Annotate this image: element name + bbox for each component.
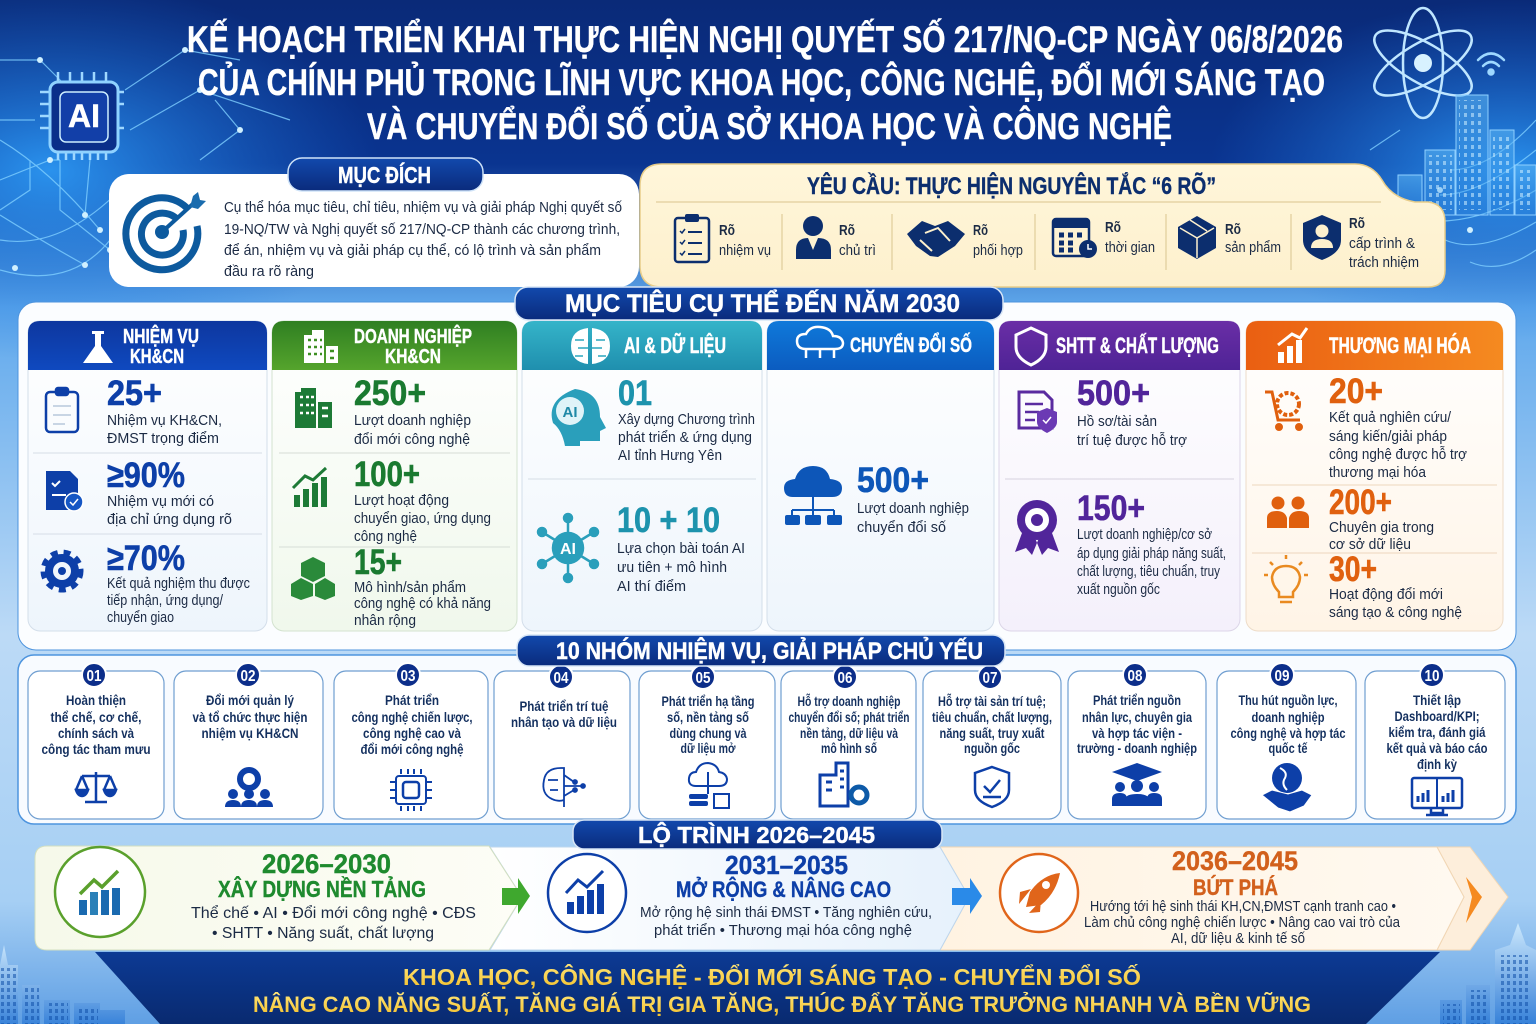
card 08: trường - doanh nghiệp [1077,741,1197,756]
stat: 25+: Nhiệm vụ KH&CN, [107,413,222,429]
stat: 15+: công nghệ có khả năng [354,596,491,612]
icon: rocket [1019,873,1060,913]
arrow: orange [1466,877,1482,923]
item: rõ phối hợp [907,221,1023,259]
card 06 [781,665,916,819]
icon: flask [83,331,113,363]
icon: gear team [225,770,273,807]
column: thương mại hóa: THƯƠNG MẠI HÓA [1329,333,1471,358]
column: thương mại hóa [1246,321,1503,631]
stat: 01 [618,374,755,464]
card 08 [1068,663,1206,819]
icon: chip [390,769,432,811]
item: rõ sản phẩm [1178,216,1281,259]
card 05: dùng chung và [670,726,747,741]
text: mục đích: 19-NQ/TW và Nghị quyết số 217/NQ-CP thành các chương trình, [224,221,620,238]
card 10: Dashboard/KPI; [1394,709,1480,724]
stat: 10 + 10: 10 + 10 [617,501,720,540]
stat: 20+ [1329,372,1467,481]
stage: 2026-2030: • SHTT • Năng suất, chất lượng [212,925,434,942]
item: rõ thời gian: Rõ [1105,220,1121,236]
icon: document shield [1019,392,1057,433]
stage: 2031-2035: 2031–2035 [725,850,848,880]
column: AI & dữ liệu: AI & DỮ LIỆU [624,333,726,358]
stage: 2036-2045: AI, dữ liệu & kinh tế số [1171,931,1305,947]
card 01: thể chế, cơ chế, [50,710,142,725]
column: chuyển đổi số: CHUYỂN ĐỔI SỐ [850,333,972,357]
icon: AI network [538,514,598,582]
stat: 500+ doanh nghiệp [857,461,969,536]
card 08: 08 [1128,668,1143,685]
card 02: 02 [240,668,256,685]
stat: 30+: 30+ [1329,550,1377,589]
card 02 [174,663,323,819]
item: rõ thời gian: thời gian [1105,240,1155,256]
stat: 90%: Nhiệm vụ mới có [107,494,214,510]
stat: 20+: thương mại hóa [1329,465,1427,481]
card 01: chính sách và [58,726,134,741]
stat: 01: phát triển & ứng dụng [618,430,752,446]
item: rõ thời gian [1053,219,1155,258]
card 09: Thu hút nguồn lực, [1238,693,1338,708]
heading: mục đích [288,158,483,191]
card 02: Đổi mới quản lý [206,693,294,708]
stat: 200+: 200+ [1329,483,1392,522]
item: rõ chủ trì: Rõ [839,223,855,239]
card 09: 09 [1274,668,1290,685]
stat: 20+: công nghệ được hỗ trợ [1329,446,1467,463]
stage: 2036-2045: 2036–2045 [1172,846,1298,876]
card 04: nhân tạo và dữ liệu [511,715,617,730]
stat: 01: AI tỉnh Hưng Yên [618,448,722,464]
stage: 2026-2030: XÂY DỰNG NỀN TẢNG [218,874,426,902]
card 03: đổi mới công nghệ [360,742,464,757]
stat: 25+: 25+ [107,374,162,413]
stat: 500+ hồ sơ [1077,374,1187,449]
card 08: và hợp tác viện - [1092,726,1182,741]
column: nhiệm vụ KH&CN [28,321,267,631]
icon: globe handshake [1262,763,1312,812]
illustration: top right city [1398,95,1536,215]
text: mục đích: đầu ra rõ ràng [224,263,314,280]
stat: 10 + 10 [617,501,745,595]
card 10: kiểm tra, đánh giá [1388,725,1486,740]
arrow: chevron end [1437,847,1508,950]
item: rõ phối hợp: Rõ [973,223,988,239]
stat: 200+: cơ sở dữ liệu [1329,537,1411,553]
card 04 [494,665,630,819]
stage: 2026-2030 [35,846,522,950]
stage: 2031-2035: Mở rộng hệ sinh thái ĐMST • Tăng nghiên cứu, [640,904,932,921]
card 07: nguồn gốc [964,741,1020,756]
stat: 15+: 15+ [354,543,402,582]
icon: growth chart green-blue [79,871,120,915]
item: rõ cấp trình và trách nhiệm: trách nhiệm [1349,255,1419,271]
item: rõ sản phẩm: Rõ [1225,222,1241,238]
icon: checklist document [46,471,83,511]
stat: 100+: 100+ [354,455,420,494]
card 06: 06 [838,670,853,687]
item: rõ phối hợp: phối hợp [973,243,1023,259]
stat: 250+ [354,374,471,448]
stage: 2031-2035 [490,847,969,950]
card 05 [639,665,775,819]
card 05: 05 [696,670,711,687]
icon: building white [304,330,338,363]
arrow: blue [952,878,982,914]
stat: 25+ [107,374,222,447]
card 07: 07 [982,670,998,687]
icon: dashboard monitor [1412,778,1462,815]
stat: 90%: địa chỉ ứng dụng rõ [107,512,232,528]
card 01: công tác tham mưu [42,742,150,757]
footer banner [95,952,1440,1024]
column: nhiệm vụ KH&CN: NHIỆM VỤ [123,324,199,348]
stat: 70%: ≥70% [107,539,185,578]
item: rõ nhiệm vụ [675,214,771,262]
card 09: doanh nghiệp [1252,710,1324,725]
stat: 90% [107,456,232,528]
heading: mục đích: MỤC ĐÍCH [338,161,431,188]
icon: light bulb [1264,555,1308,602]
heading: lộ trình [573,820,942,849]
stat: 70%: tiếp nhận, ứng dụng/ [107,593,224,609]
card 03 [334,663,488,819]
icon: target [126,192,206,270]
icon: experts [1267,496,1309,528]
stat: 100+: Lượt hoạt động [354,493,449,509]
stat: 250+: Lượt doanh nghiệp [354,413,471,429]
footer banner: NÂNG CAO NĂNG SUẤT, TĂNG GIÁ TRỊ GIA TĂNG, THÚC ĐẨY TĂNG TRƯỞNG NHANH VÀ BỀN VỮNG [253,992,1311,1017]
item: rõ cấp trình và trách nhiệm: cấp trình & [1349,236,1415,252]
card 06: chuyển đổi số; phát triển [788,710,910,725]
card 07 [923,665,1061,819]
card 07: năng suất, truy xuất [940,726,1045,741]
icon: building gear [820,763,867,806]
stat: 500+ hồ sơ: 500+ [1077,374,1150,413]
card 06: nền tảng, dữ liệu và [800,726,898,741]
heading: lộ trình: LỘ TRÌNH 2026–2045 [638,821,875,848]
card 01: 01 [86,668,102,685]
stat: 150+: xuất nguồn gốc [1077,582,1160,598]
stat: 250+: đổi mới công nghệ [354,432,470,448]
column: doanh nghiệp KH&CN: DOANH NGHIỆP [354,324,472,348]
card 10: định kỳ [1417,757,1457,772]
icon: shield check [975,767,1009,807]
item: rõ chủ trì: chủ trì [839,243,876,259]
card 08: Phát triển nguồn [1093,693,1181,708]
stat: 250+: 250+ [354,374,426,413]
card 06: mô hình số [821,741,877,756]
icon: cloud outline [797,327,843,358]
card 10: 10 [1424,668,1440,685]
stat: 150+ [1077,489,1226,598]
card 09: quốc tế [1268,741,1308,756]
stat: 20+: 20+ [1329,372,1383,411]
stat: 100+: chuyển giao, ứng dụng [354,511,491,527]
heading: mục tiêu cụ thể: MỤC TIÊU CỤ THỂ ĐẾN NĂM 2030 [565,288,960,318]
icon: AI head [552,389,606,446]
icon: atom [1365,8,1481,118]
card 10: Thiết lập [1413,693,1461,708]
column: doanh nghiệp KH&CN: KH&CN [385,346,441,368]
panel: 10 nhóm nhiệm vụ [18,655,1516,824]
column: doanh nghiệp KH&CN [272,321,517,631]
icon: medal [1015,500,1059,555]
icon: growth chart blue [566,871,604,914]
stat: 15+: nhân rộng [354,613,416,629]
item: rõ sản phẩm: sản phẩm [1225,240,1281,256]
stat: 150+: 150+ [1077,489,1145,528]
card 05: số, nền tảng số [667,710,749,725]
stat: 150+: áp dụng giải pháp năng suất, [1077,546,1226,562]
item: rõ cấp trình và trách nhiệm: Rõ [1349,216,1365,232]
stat: 30+: sáng tạo & công nghệ [1329,605,1462,621]
stat: 15+ [354,543,491,629]
card 07: tiêu chuẩn, chất lượng, [932,710,1052,725]
stat: 90%: ≥90% [107,456,185,495]
panel: yêu cầu 6 rõ [640,164,1445,287]
stage: 2036-2045: Làm chủ công nghệ chiến lược • Nâng cao vai trò của [1084,915,1401,931]
card 10: kết quả và báo cáo [1386,741,1488,756]
icon: scales [76,772,116,803]
card 04: Phát triển trí tuệ [520,699,609,714]
stat: 30+: Hoạt động đổi mới [1329,587,1443,603]
stat: 30+ [1329,550,1462,621]
column: chuyển đổi số [767,321,994,631]
panel: mục đích [109,158,639,287]
column: AI & dữ liệu [522,321,762,631]
stat: 70%: chuyển giao [107,610,174,626]
text: mục đích: để án, nhiệm vụ và giải pháp cụ thể, có lộ trình và sản phẩm [224,242,601,259]
panel: lộ trình 2026-2045 [35,846,1508,950]
card 05: Phát triển hạ tầng [662,694,754,709]
card 03: công nghệ cao và [363,726,461,741]
stat: 10 + 10: AI thí điểm [617,579,686,595]
stat: 150+: chất lượng, tiêu chuẩn, truy [1077,564,1221,580]
stat: 200+: Chuyên gia trong [1329,520,1434,536]
stat: 70% [107,539,250,626]
icon: cloud network [784,466,842,525]
column: SHTT & chất lượng: SHTT & CHẤT LƯỢNG [1056,333,1219,358]
icon: cloud data [689,763,729,808]
stage: 2026-2030: 2026–2030 [262,849,391,879]
icon: digital brain [543,768,585,807]
card 03: Phát triển [385,693,439,708]
icon: AI head: AI [562,404,578,421]
column: SHTT & chất lượng [999,321,1240,631]
icon: graduates [1112,763,1162,806]
item: rõ nhiệm vụ: Rõ [719,223,735,239]
stat: 150+: Lượt doanh nghiệp/cơ sở [1077,527,1212,543]
text: mục đích: Cụ thể hóa mục tiêu, chỉ tiêu, nhiệm vụ và giải pháp Nghị quyết số [224,199,623,216]
stat: 01: 01 [618,374,652,413]
icon: brain [571,328,610,364]
stat: 20+: sáng kiến/giải pháp [1329,429,1447,445]
card 03: 03 [400,668,416,685]
stat: 200+ [1329,483,1434,553]
stage: 2031-2035: phát triển • Thương mại hóa công nghệ [654,922,912,939]
stage: 2031-2035: MỞ RỘNG & NÂNG CAO [676,877,891,902]
heading: yêu cầu: YÊU CẦU: THỰC HIỆN NGUYÊN TẮC “6 RÕ” [807,172,1216,200]
footer banner: KHOA HỌC, CÔNG NGHỆ - ĐỔI MỚI SÁNG TẠO - CHUYỂN ĐỔI SỐ [403,963,1141,990]
stage: 2036-2045 [940,846,1464,950]
card 02: và tổ chức thực hiện [192,710,308,725]
heading: 10 nhóm nhiệm vụ: 10 NHÓM NHIỆM VỤ, GIẢI PHÁP CHỦ YẾU [556,636,983,665]
stat: 500+ doanh nghiệp: Lượt doanh nghiệp [857,501,969,517]
card 07: Hỗ trợ tài sản trí tuệ; [938,694,1046,709]
panel: mục tiêu cụ thể đến năm 2030 [18,302,1516,650]
card 09: công nghệ và hợp tác [1230,726,1346,741]
card 03: công nghệ chiến lược, [352,710,472,725]
card 04: 04 [554,670,569,687]
stat: 500+ doanh nghiệp: 500+ [857,461,929,500]
card 05: dữ liệu mở [680,741,736,756]
stat: 15+: Mô hình/sản phẩm [354,580,466,596]
item: rõ chủ trì [796,216,876,259]
icon: growth chart white [1278,328,1307,363]
icon: AI network: AI [560,541,576,558]
card 08: nhân lực, chuyên gia [1082,710,1192,725]
card 06: Hỗ trợ doanh nghiệp [798,694,900,709]
item: rõ nhiệm vụ: nhiệm vụ [719,243,771,259]
column: nhiệm vụ KH&CN: KH&CN [130,346,184,368]
icon: clipboard [46,388,78,432]
stat: 500+ hồ sơ: Hồ sơ/tài sản [1077,414,1157,430]
item: rõ cấp trình và trách nhiệm [1303,215,1419,271]
card 02: nhiệm vụ KH&CN [202,726,298,741]
stat: 70%: Kết quả nghiệm thu được [107,576,250,592]
stat: 10 + 10: ưu tiên + mô hình [617,560,727,576]
stat: 100+: công nghệ [354,529,417,545]
icon: gear [43,552,81,590]
icon: AI chip: AI [68,98,100,134]
stage: 2036-2045: BỨT PHÁ [1193,875,1278,900]
icon: shield [1016,328,1046,365]
illustration: bottom left city [0,945,125,1024]
icon: cubes [291,557,335,600]
stat: 500+ doanh nghiệp: chuyển đổi số [857,520,946,536]
arrow: green [502,878,530,914]
card 09 [1217,663,1356,819]
icon: wifi [1478,54,1504,74]
stat: 20+: Kết quả nghiên cứu/ [1329,410,1452,426]
card 01 [28,663,164,819]
stat: 100+ [354,455,491,545]
title [187,18,1343,147]
card 01: Hoàn thiện [66,693,126,708]
stat: 25+: ĐMST trọng điểm [107,431,219,447]
stage: 2026-2030: Thể chế • AI • Đổi mới công nghệ • CĐS [191,904,476,922]
icon: growth chart green [293,468,327,507]
title: VÀ CHUYỂN ĐỔI SỐ CỦA SỞ KHOA HỌC VÀ CÔNG NGHỆ [367,104,1172,147]
stat: 500+ hồ sơ: trí tuệ được hỗ trợ [1077,432,1187,449]
stat: 10 + 10: Lựa chọn bài toán AI [617,541,745,557]
illustration: bottom right city [1440,923,1536,1024]
stat: 01: Xây dựng Chương trình [618,412,755,428]
card 10 [1365,663,1505,819]
icon: building green [295,388,332,428]
text: mục đích [224,199,623,280]
icon: cart gear [1265,392,1302,430]
icon: AI chip [40,72,124,160]
stage: 2036-2045: Hướng tới hệ sinh thái KH,CN,ĐMST cạnh tranh cao • [1090,899,1396,915]
